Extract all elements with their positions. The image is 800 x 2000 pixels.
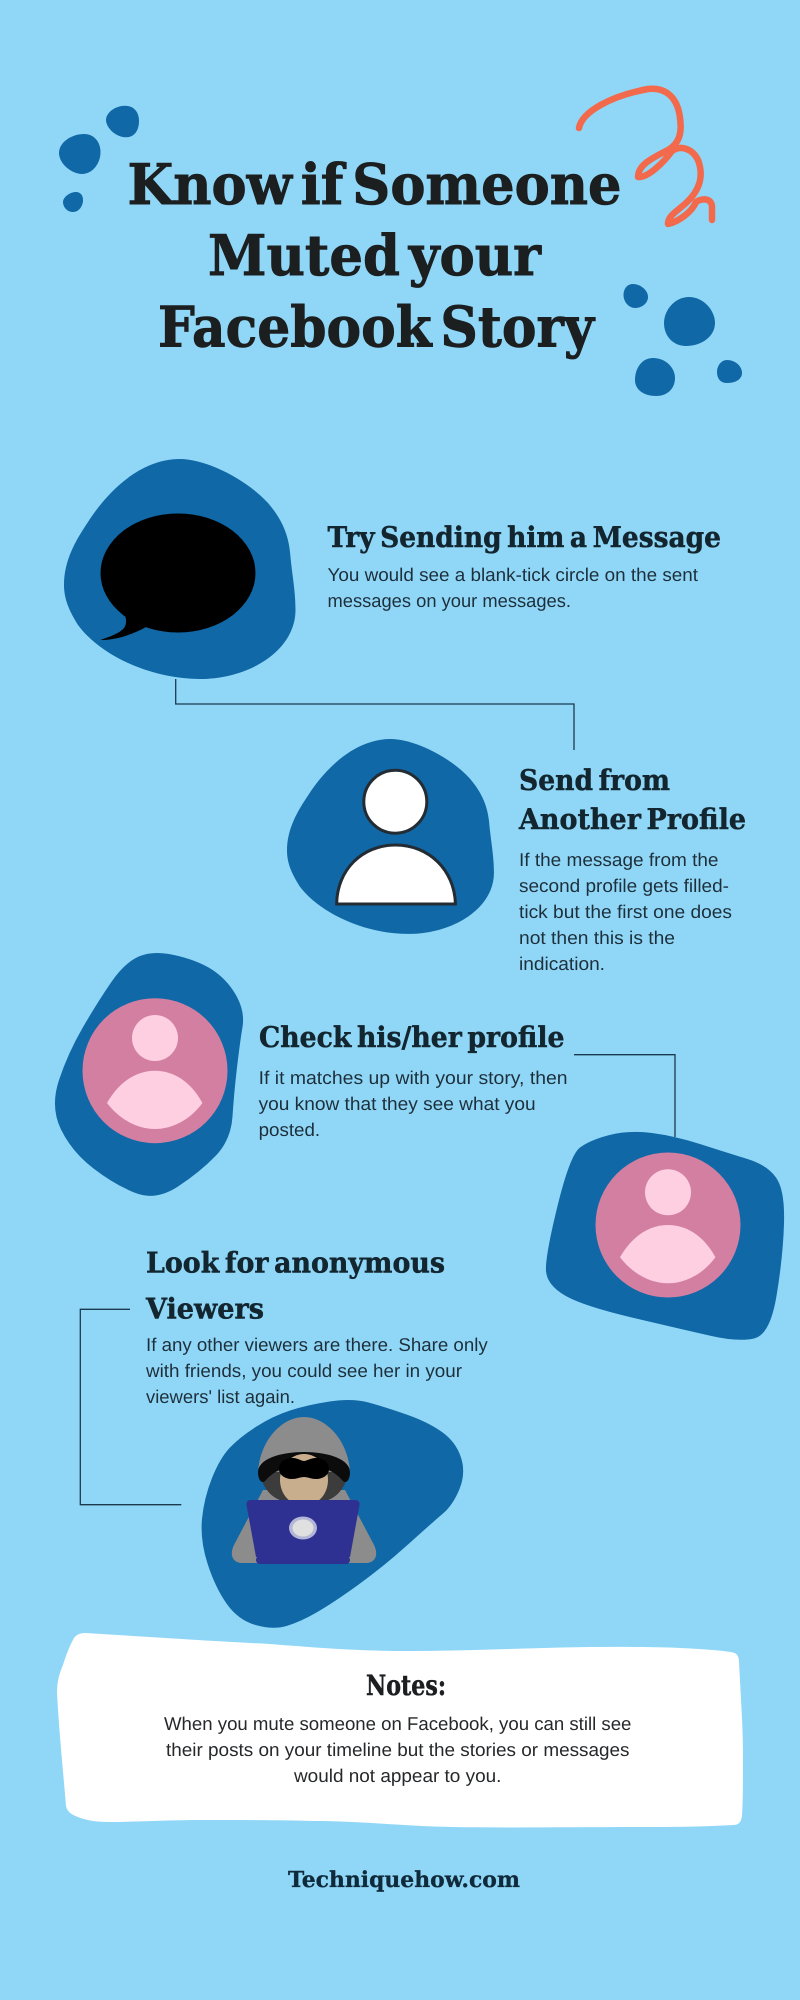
footer: website: Techniquehow.com bbox=[288, 1867, 520, 1893]
text: anonymous viewers description bbox=[145, 1334, 488, 1407]
decorative blobs top left bbox=[59, 106, 139, 212]
text: another profile description: second profile gets filled- bbox=[519, 875, 729, 896]
text: another profile description: not then this is the bbox=[519, 927, 675, 948]
text: try sending description bbox=[328, 564, 698, 611]
text: try sending description: You would see a blank-tick circle on the sent bbox=[328, 564, 698, 585]
decorative blobs right of title bbox=[624, 284, 742, 396]
title: Muted your bbox=[208, 223, 542, 289]
blob behind speech bubble bbox=[64, 459, 296, 679]
panel: notes bbox=[57, 1633, 743, 1827]
blob behind user icon bbox=[287, 739, 494, 934]
text: another profile description: tick but the first one does bbox=[519, 901, 732, 922]
heading: send from another profile: Another Profile bbox=[518, 802, 746, 836]
step 3: check profile bbox=[55, 953, 568, 1196]
text: notes description: would not appear to you. bbox=[293, 1765, 501, 1786]
white notes shape bbox=[57, 1633, 743, 1827]
heading: anonymous viewers: Viewers bbox=[145, 1292, 264, 1326]
step 2: another profile bbox=[287, 739, 746, 974]
title: Know if Someone bbox=[128, 152, 622, 218]
blob behind hacker bbox=[202, 1400, 463, 1628]
text: check profile description bbox=[259, 1067, 568, 1140]
icon: second pink avatar bbox=[596, 1152, 740, 1298]
text: try sending description: messages on your messages. bbox=[328, 590, 571, 611]
text: notes description: their posts on your timeline but the stories or messages bbox=[166, 1739, 630, 1760]
blob behind second avatar bbox=[546, 1132, 784, 1340]
text: check profile description: you know that they see what you bbox=[259, 1093, 536, 1114]
text: another profile description bbox=[519, 849, 732, 974]
text: notes description: When you mute someone on Facebook, you can still see bbox=[164, 1713, 631, 1734]
icon: speech bubble bbox=[100, 514, 256, 640]
step 1: send a message bbox=[64, 459, 721, 679]
step 4: anonymous viewers bbox=[145, 1246, 488, 1628]
text: another profile description: indication. bbox=[519, 953, 605, 974]
heading: send from another profile bbox=[518, 763, 746, 836]
connector for step 4 bbox=[80, 1309, 181, 1505]
text: anonymous viewers description: with friends, you could see her in your bbox=[145, 1360, 462, 1381]
title: Facebook Story bbox=[158, 295, 595, 361]
text: another profile description: If the message from the bbox=[519, 849, 718, 870]
heading: send from another profile: Send from bbox=[519, 763, 670, 797]
icon: hooded hacker at laptop bbox=[232, 1417, 376, 1564]
heading: anonymous viewers bbox=[145, 1246, 445, 1326]
connector from step 1 to step 2 bbox=[176, 679, 574, 750]
icon: white user bbox=[337, 770, 455, 904]
text: check profile description: If it matches up with your story, then bbox=[259, 1067, 568, 1088]
connector from step 3 to avatar bbox=[574, 1055, 675, 1137]
blob behind pink avatar bbox=[55, 953, 243, 1196]
title bbox=[128, 152, 622, 361]
heading: try sending: Try Sending him a Message bbox=[328, 520, 721, 554]
heading: anonymous viewers: Look for anonymous bbox=[146, 1246, 445, 1280]
icon: pink avatar bbox=[82, 998, 228, 1143]
heading: check profile: Check his/her profile bbox=[259, 1020, 564, 1054]
text: anonymous viewers description: viewers' list again. bbox=[146, 1386, 295, 1407]
heading: notes: Notes: bbox=[366, 1669, 446, 1702]
text: check profile description: posted. bbox=[259, 1119, 320, 1140]
text: anonymous viewers description: If any other viewers are there. Share only bbox=[146, 1334, 488, 1355]
orange squiggle bbox=[579, 89, 712, 224]
second avatar group bbox=[546, 1132, 784, 1340]
text: notes description bbox=[164, 1713, 631, 1786]
